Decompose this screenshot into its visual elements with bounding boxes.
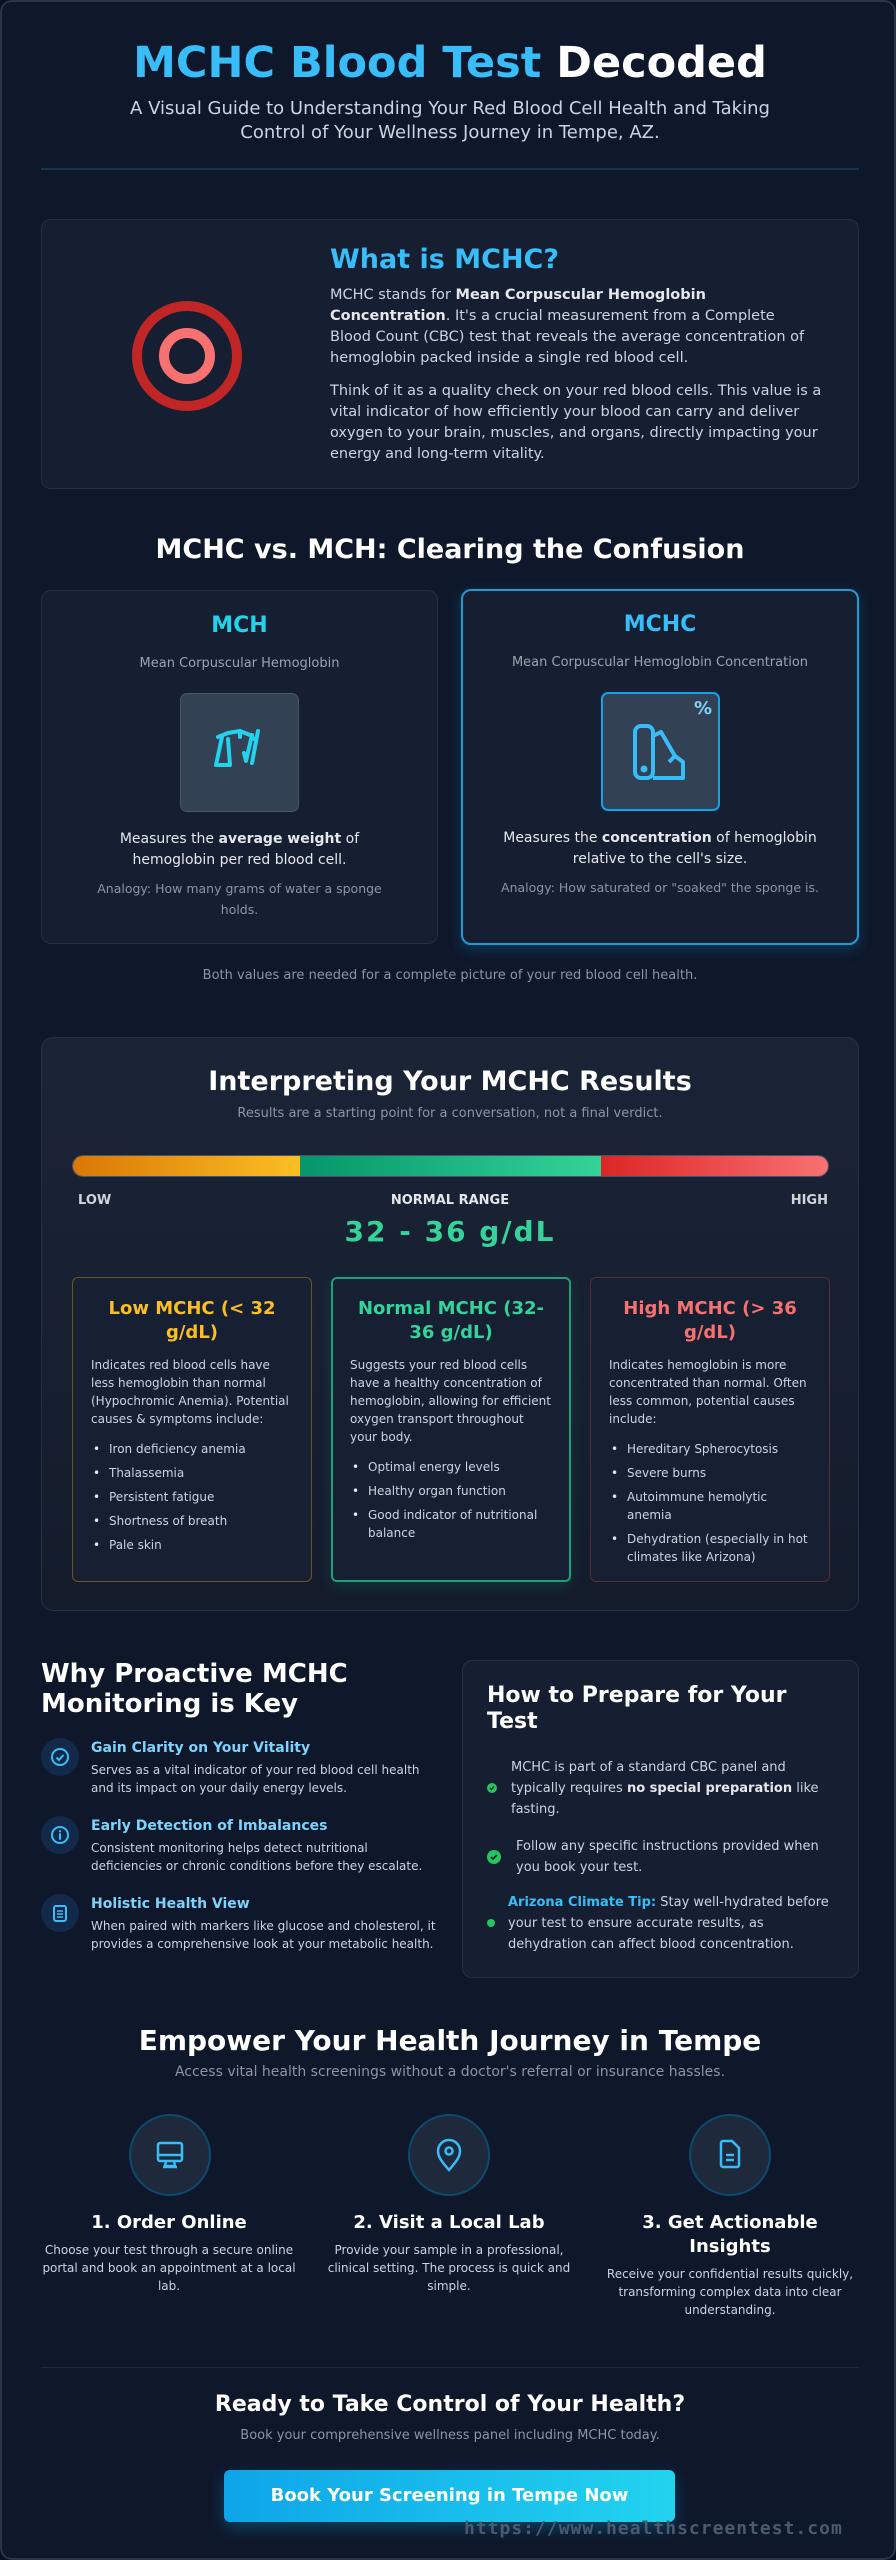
panel: how to prepare [462,1660,859,1978]
step 1: 1. Order Online [91,2212,247,2233]
benefit: early detection [41,1816,422,1873]
benefits list [41,1738,436,1951]
icon: monitor [129,2114,211,2196]
watermark url: https://www.healthscreentest.com [464,2518,843,2539]
button: book screening: Book Your Screening in Tempe Now [271,2485,628,2506]
icon: document [689,2114,771,2196]
box: high [590,1277,830,1582]
icon: map pin [408,2114,490,2196]
panel: what is MCHC [41,219,859,489]
panel: MCH [41,590,438,944]
prep item 3: arizona tip: Arizona Climate Tip: Stay well-hydrated before your test to ensure accurate results, as dehydration can affect blood concentration. [508,1895,829,1952]
text: Book your comprehensive wellness panel including MCHC today. [240,2428,660,2443]
benefit: clarity: Serves as a vital indicator of your red blood cell health and its impact on your daily energy levels. [91,1763,420,1795]
box: high: Severe burns [627,1466,706,1480]
step 2: 2. Visit a Local Lab [353,2212,545,2233]
benefit: clarity: Gain Clarity on Your Vitality [91,1740,310,1756]
title: MCHC Blood Test Decoded [133,38,767,88]
box: high: Indicates hemoglobin is more concentrated than normal. Often less common, potential causes include: [609,1358,807,1426]
heading: why proactive monitoring: Why Proactive MCHC Monitoring is Key [41,1659,348,1719]
box: normal [331,1277,571,1582]
box: low: Pale skin [109,1538,162,1552]
panel: MCH: Analogy: How many grams of water a sponge holds. [97,881,382,917]
panel: MCHC: Analogy: How saturated or "soaked" the sponge is. [501,880,819,895]
text: definition [330,287,821,462]
panel: MCH: Mean Corpuscular Hemoglobin [140,656,339,671]
heading: call to action: Ready to Take Control of Your Health? [215,2392,685,2417]
range bar [72,1155,829,1177]
step 3 [607,2114,853,2317]
benefit: holistic [41,1894,436,1951]
button: book screening [224,2470,675,2522]
box: normal: Healthy organ function [368,1484,506,1498]
panel: interpreting results: NORMAL RANGE [391,1193,509,1208]
box: normal: Suggests your red blood cells have a healthy concentration of hemoglobin, allowing for efficient oxygen transport throughout your body. [350,1358,551,1444]
heading: Interpreting Your MCHC Results [208,1066,692,1097]
box: high: High MCHC (> 36 g/dL) [623,1298,797,1343]
panel: MCH: MCH [211,613,268,638]
range labels: LOW [78,1193,111,1208]
text: definition: MCHC stands for Mean Corpuscular Hemoglobin Concentration. It's a crucial measurement from a Complete Blood Count (CBC) test that reveals the average concentration of hemoglobin packed inside a single red blood cell. [330,287,804,366]
benefit: early detection: Consistent monitoring helps detect nutritional deficiencies or chronic conditions before they escalate. [91,1841,422,1873]
heading: What is MCHC?: What is MCHC? [330,244,559,275]
step 1: Choose your test through a secure online portal and book an appointment at a local lab. [42,2243,296,2293]
benefit: holistic: When paired with markers like glucose and cholesterol, it provides a comprehensive look at your metabolic health. [91,1919,436,1951]
step 3: Receive your confidential results quickly, transforming complex data into clear understanding. [607,2267,853,2317]
heading: empower: Empower Your Health Journey in Tempe [139,2024,761,2057]
prep item 1: MCHC is part of a standard CBC panel and typically requires no special preparation like fasting. [511,1760,819,1817]
normal range value: 32 - 36 g/dL [345,1215,555,1248]
panel: interpreting results: HIGH [791,1193,828,1208]
icon: red blood cell rings [132,301,242,411]
icon: weight scale [180,693,299,812]
panel: how to prepare: How to Prepare for Your Test [487,1683,786,1734]
box: low: Iron deficiency anemia [109,1442,246,1456]
text: definition: Think of it as a quality check on your red blood cells. This value is a vital indicator of how efficiently your blood can carry and deliver oxygen to your brain, muscles, and organs, directly impacting your energy and long-term vitality. [330,383,821,462]
panel: MCHC [461,589,859,945]
panel: MCHC: Mean Corpuscular Hemoglobin Concentration [512,655,808,670]
box: normal: Good indicator of nutritional balance [368,1508,537,1540]
step 2 [328,2114,570,2293]
subtitle: A Visual Guide to Understanding Your Red Blood Cell Health and Taking Control of Your Wellness Journey in Tempe, AZ. [130,98,770,143]
box: normal: Optimal energy levels [368,1460,500,1474]
box: low: Thalassemia [109,1466,184,1480]
panel: interpreting results: Results are a starting point for a conversation, not a final verdict. [237,1106,663,1121]
box: low: Shortness of breath [109,1514,227,1528]
box: high: Hereditary Spherocytosis [627,1442,778,1456]
box: normal: Normal MCHC (32-36 g/dL) [358,1298,544,1343]
box: low: Low MCHC (< 32 g/dL) [108,1298,276,1343]
panel: interpreting results [41,1037,859,1611]
box: low [72,1277,312,1582]
prep item 2: Follow any specific instructions provided when you book your test. [516,1839,819,1875]
step 1 [42,2114,296,2293]
benefit: clarity [41,1738,420,1795]
footnote: Both values are needed for a complete picture of your red blood cell health. [203,968,697,983]
box: low: Indicates red blood cells have less hemoglobin than normal (Hypochromic Anemia). Potential causes & symptoms include: [91,1358,289,1426]
box: high: Dehydration (especially in hot climates like Arizona) [627,1532,808,1564]
icon: swatch with percent [601,692,720,811]
text: MCH description: Measures the average weight of hemoglobin per red blood cell. [120,831,359,868]
panel: MCHC: MCHC [624,612,696,637]
step 3: 3. Get Actionable Insights [642,2212,818,2257]
benefit: early detection: Early Detection of Imbalances [91,1818,327,1834]
step 2: Provide your sample in a professional, clinical setting. The process is quick and simple. [328,2243,570,2293]
heading: MCHC vs MCH: MCHC vs. MCH: Clearing the Confusion [156,534,744,565]
icon: swatch with percent: % [694,698,712,719]
box: low: Persistent fatigue [109,1490,214,1504]
box: high: Autoimmune hemolytic anemia [627,1490,767,1522]
text: MCHC description: Measures the concentration of hemoglobin relative to the cell's size. [503,830,817,867]
benefit: holistic: Holistic Health View [91,1896,250,1912]
text: Access vital health screenings without a doctor's referral or insurance hassles. [175,2064,725,2080]
